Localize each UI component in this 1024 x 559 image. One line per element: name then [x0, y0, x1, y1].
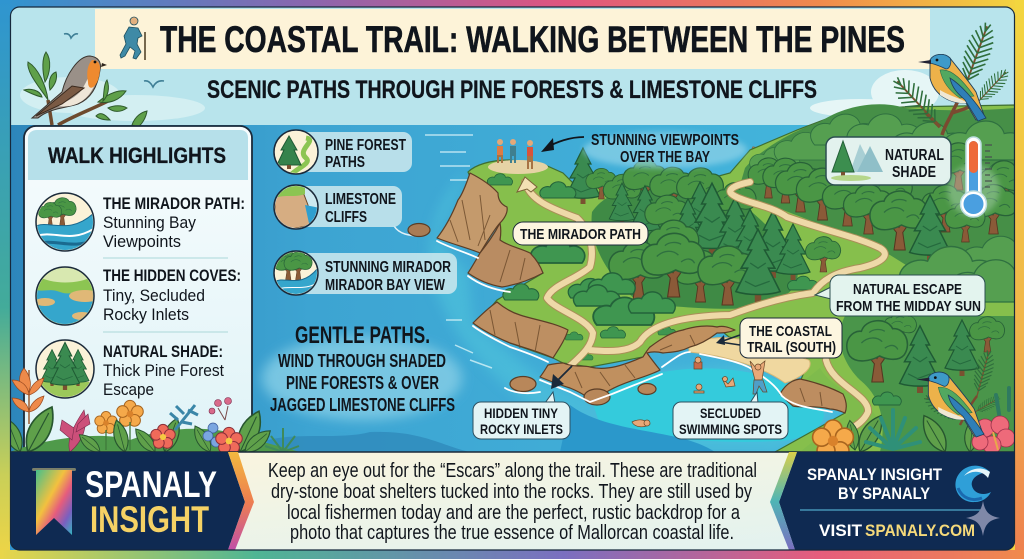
legend: mirador bay view: STUNNING MIRADOR [325, 259, 451, 276]
callout: swimming spots: SECLUDED [700, 405, 761, 421]
footer tip text: photo that captures the true essence of Mallorcan coastal life. [290, 522, 734, 544]
footer right brand: BY SPANALY [838, 485, 930, 503]
icon: thermometer [948, 137, 1000, 217]
central forest trees [566, 148, 841, 305]
highlight 1: mirador path: THE MIRADOR PATH: [103, 195, 245, 213]
footer right brand: VISIT [819, 521, 863, 540]
legend: limestone cliffs [274, 185, 402, 232]
highlight 3: natural shade: Escape [103, 380, 154, 399]
icon: hiker [120, 17, 145, 60]
icon: wave [955, 466, 991, 502]
callout: natural escape [815, 275, 985, 316]
sea shading [262, 368, 824, 452]
highlight 3: natural shade [36, 340, 224, 402]
pine branch top right [893, 22, 1009, 136]
footer tip text [268, 460, 757, 544]
arrow to hidden inlets [551, 366, 572, 389]
coastal light water [430, 190, 826, 448]
foliage: bottom left [0, 368, 300, 457]
sea ripples [394, 135, 492, 368]
legend: pine forest paths [274, 130, 412, 176]
legend: limestone cliffs: LIMESTONE [325, 191, 396, 208]
distant cliff [752, 146, 756, 149]
land [468, 105, 1015, 452]
callout: coastal trail south [716, 318, 842, 358]
icon: rainbow ribbon [32, 468, 76, 535]
footer left brand [10, 452, 254, 550]
rock shading [450, 195, 822, 406]
panel heading: WALK HIGHLIGHTS [48, 143, 226, 168]
coastal trail [525, 182, 885, 436]
gentle paths text block: JAGGED LIMESTONE CLIFFS [270, 395, 455, 415]
footer [10, 452, 1015, 550]
cliffs [408, 173, 846, 413]
callout: coastal trail south: TRAIL (SOUTH) [747, 339, 836, 356]
foliage: bottom right [813, 349, 1015, 460]
arrow: mirador path head [517, 177, 537, 192]
label: the mirador path: THE MIRADOR PATH [520, 226, 641, 243]
highlight 3: natural shade: NATURAL SHADE: [103, 343, 223, 361]
footer right brand [770, 452, 1015, 550]
gentle paths text block: WIND THROUGH SHADED [278, 351, 446, 371]
callout: hidden inlets: ROCKY INLETS [480, 421, 563, 437]
ridge canopy [749, 114, 1014, 191]
blue bird lower [916, 372, 984, 437]
callout: swimming spots [673, 392, 788, 439]
callout: stunning viewpoints: STUNNING VIEWPOINTS [591, 132, 739, 149]
callout: stunning viewpoints [541, 132, 747, 168]
panel: walk highlights [24, 126, 252, 462]
callout: hidden inlets: HIDDEN TINY [484, 405, 559, 421]
icon: sparkle [966, 501, 1000, 536]
right meadow patch [800, 368, 880, 452]
natural shade label [826, 137, 951, 185]
central forest shade [592, 187, 798, 309]
callout: coastal trail south: THE COASTAL [749, 323, 832, 340]
callout: stunning viewpoints: OVER THE BAY [620, 149, 710, 166]
natural shade label: SHADE [892, 164, 936, 181]
footer left brand: INSIGHT [90, 499, 209, 540]
legend: pine forest paths: PINE FOREST [325, 137, 406, 154]
gentle paths text block: PINE FORESTS & OVER [286, 373, 439, 393]
highlight 1: mirador path [36, 193, 245, 252]
lower right forest shade [840, 316, 1015, 452]
title banner [95, 9, 930, 69]
callout: hidden inlets [473, 392, 570, 439]
legend: mirador bay view: MIRADOR BAY VIEW [325, 277, 445, 294]
gentle paths text block [262, 322, 462, 420]
natural shade label: NATURAL [885, 147, 944, 164]
highlight 2: hidden coves: THE HIDDEN COVES: [103, 267, 241, 285]
legend: pine forest paths: PATHS [325, 154, 365, 171]
foam [437, 241, 832, 412]
upper right forest shade [742, 104, 1014, 264]
footer tip text: local fishermen today and are the perfect, rustic backdrop for a [287, 502, 741, 524]
swimmers [632, 357, 767, 427]
beach [689, 338, 810, 383]
label: the mirador path [513, 222, 648, 245]
subtitle: SCENIC PATHS THROUGH PINE FORESTS & LIMESTONE CLIFFS [207, 76, 817, 104]
people at viewpoint [488, 139, 548, 174]
highlight 2: hidden coves: Tiny, Secluded [103, 286, 205, 305]
legend: limestone cliffs: CLIFFS [325, 209, 367, 226]
callout: natural escape: NATURAL ESCAPE [853, 281, 962, 298]
footer tip text: Keep an eye out for the “Escars” along the trail. These are traditional [268, 460, 757, 482]
footer left brand: SPANALY [85, 464, 217, 505]
highlight 2: hidden coves [35, 267, 241, 326]
robin on branch [24, 52, 147, 127]
footer tip text: dry-stone boat shelters tucked into the rocks. They are still used by [271, 481, 752, 503]
gentle paths text block: GENTLE PATHS. [295, 322, 430, 349]
legend: mirador bay view [274, 251, 457, 296]
clouds [20, 70, 939, 121]
right forest trees [748, 158, 1024, 312]
birds in sky [64, 34, 164, 87]
footer right brand: SPANALY.COM [865, 521, 975, 540]
callout: natural escape: FROM THE MIDDAY SUN [836, 298, 981, 315]
south forest [847, 312, 1005, 405]
sea [11, 125, 844, 452]
highlight 1: mirador path: Stunning Bay [103, 213, 196, 232]
callout: swimming spots: SWIMMING SPOTS [679, 421, 782, 437]
blue bird upper [918, 54, 986, 121]
sky [10, 7, 1015, 127]
highlight 2: hidden coves: Rocky Inlets [103, 305, 189, 324]
highlight 1: mirador path: Viewpoints [103, 232, 181, 251]
highlight 3: natural shade: Thick Pine Forest [103, 361, 224, 380]
footer right brand: SPANALY INSIGHT [807, 466, 942, 484]
meadow bushes [487, 174, 676, 360]
